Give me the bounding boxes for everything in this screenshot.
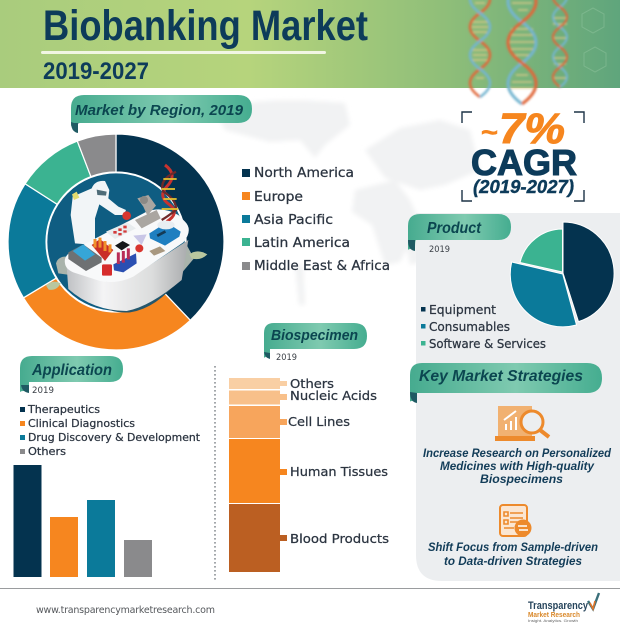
segment: North America — [116, 134, 224, 320]
section tab: Product — [408, 214, 511, 255]
website link: www.transparencymarketresearch.com — [36, 605, 215, 616]
strategy text: data-driven: to Data-driven Strategies — [444, 554, 582, 568]
icon: DNA helices — [470, 0, 567, 104]
segment: Others: Others — [290, 377, 334, 391]
legend: market by region: North America — [254, 166, 354, 181]
table body — [67, 240, 188, 311]
blue rack — [113, 253, 137, 272]
strategy text: personalized medicines: Biospecimens — [480, 472, 563, 486]
segment: Latin America — [25, 141, 91, 204]
legend: market by region: Middle East & Africa — [254, 259, 390, 274]
black chip — [115, 241, 130, 250]
segment: Nucleic Acids — [229, 389, 377, 404]
section tab: Product: Product — [427, 220, 482, 237]
segment: Others — [229, 377, 334, 391]
donut chart: market by region — [8, 134, 224, 350]
slice: Consumables — [510, 262, 576, 327]
scale — [149, 222, 181, 246]
pie chart: product — [510, 222, 614, 327]
red cup — [102, 264, 112, 276]
legend: application: Therapeutics — [27, 404, 100, 416]
slice: Equipment — [563, 222, 614, 322]
scientist — [71, 181, 126, 245]
strategy text: personalized medicines: Medicines with High-quality — [440, 459, 595, 473]
CAGR callout: CAGR — [471, 142, 577, 183]
footer divider — [0, 588, 620, 589]
section tab: Product: 2019 — [429, 245, 450, 255]
segment: Middle East and Africa — [77, 134, 116, 177]
flask and red sphere — [133, 234, 147, 245]
logo: Transparency Market Research: Market Research — [528, 610, 580, 619]
orange rack — [92, 239, 113, 261]
table shadows — [56, 245, 194, 275]
strategy text: personalized medicines: Increase Research on Personalized — [423, 446, 612, 460]
section tab: Application — [20, 356, 123, 396]
legend: application — [20, 404, 200, 458]
header banner — [0, 0, 620, 104]
red dish — [122, 211, 131, 220]
DNA model — [163, 165, 174, 222]
legend: market by region: Asia Pacific — [254, 213, 333, 228]
slice: Software and Services — [520, 229, 562, 272]
icon: document with data exchange — [500, 505, 532, 536]
segment: Blood Products — [229, 504, 389, 572]
legend: product: Software & Services — [429, 337, 546, 351]
section tab: Key Market Strategies: Key Market Strategies — [419, 368, 583, 385]
section tab: Biospecimen: Biospecimen — [271, 328, 358, 344]
legend: product: Equipment — [429, 303, 496, 317]
stacked bar chart: biospecimen — [229, 377, 389, 572]
green dish right — [189, 251, 207, 259]
segment: Cell Lines: Cell Lines — [288, 415, 350, 429]
segment: Blood Products: Blood Products — [290, 532, 389, 546]
books — [68, 244, 102, 271]
logo: Transparency Market Research: Insight. Analytics. Growth — [528, 619, 578, 623]
segment: Europe — [24, 278, 190, 350]
legend: application: Drug Discovery & Development — [28, 432, 200, 444]
section tab: Application: Application — [31, 362, 112, 379]
section tab: Market by Region: Market by Region, 2019 — [75, 102, 244, 119]
strategy text: data-driven: Shift Focus from Sample-driven — [428, 540, 598, 554]
title underline — [41, 51, 326, 54]
pad — [106, 222, 136, 239]
logo: Transparency Market Research — [528, 593, 599, 623]
section tab: Key Market Strategies — [410, 363, 602, 403]
section tab: Market by Region — [71, 95, 252, 133]
legend: market by region — [242, 166, 390, 274]
CAGR callout: ~ — [481, 117, 498, 147]
segment: Human Tissues — [229, 439, 388, 503]
icon: laptop with magnifier — [496, 406, 549, 440]
section tab: Application: 2019 — [32, 386, 54, 396]
legend: product — [421, 303, 546, 351]
legend: application: Clinical Diagnostics — [28, 418, 135, 430]
subtitle: 2019-2027 — [43, 58, 149, 85]
title: Biobanking Market — [43, 2, 368, 50]
legend: product: Consumables — [429, 320, 510, 334]
segment: Nucleic Acids: Nucleic Acids — [290, 389, 377, 403]
strategy text: data-driven — [428, 540, 598, 568]
segment: Human Tissues: Human Tissues — [290, 465, 388, 479]
legend: market by region: Latin America — [254, 236, 350, 251]
microscope — [135, 195, 161, 228]
section tab: Biospecimen: 2019 — [276, 353, 297, 363]
section tab: Biospecimen — [264, 323, 367, 363]
dotted divider — [214, 366, 216, 580]
logo: Transparency Market Research: Transparency — [528, 600, 589, 612]
green dish left — [46, 282, 61, 290]
segment: Asia Pacific — [8, 184, 57, 298]
panel: product and strategies background — [416, 213, 620, 581]
legend: application: Others — [28, 446, 66, 458]
table top — [65, 209, 189, 282]
segment: Cell Lines — [229, 406, 350, 438]
CAGR callout: (2019-2027) — [473, 177, 574, 197]
world map background — [215, 100, 480, 305]
legend: market by region: Europe — [254, 190, 303, 205]
CAGR callout: 7% — [499, 105, 565, 153]
strategy text: personalized medicines — [423, 446, 612, 486]
CAGR callout — [462, 105, 584, 201]
illustration: biobank laboratory — [46, 165, 207, 313]
bar chart: application — [14, 465, 152, 577]
